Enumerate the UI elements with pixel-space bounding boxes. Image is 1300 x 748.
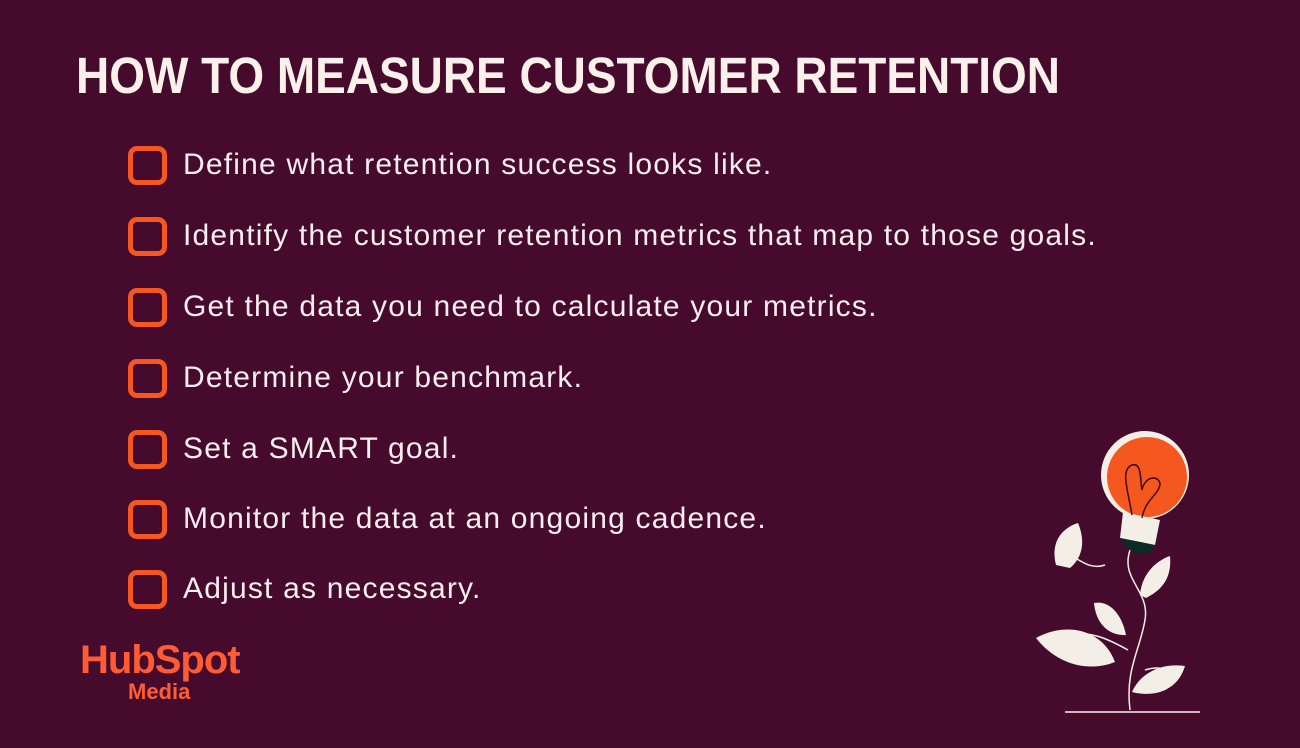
icon: lightbulb plant	[1036, 431, 1200, 713]
title: HOW TO MEASURE CUSTOMER RETENTION	[76, 47, 1060, 104]
logo: HubSpot Media: Media	[128, 679, 190, 704]
item 1: Define what retention success looks like.	[183, 148, 772, 181]
item 4: Determine your benchmark.	[183, 361, 583, 394]
logo: HubSpot Media: HubSpot	[80, 638, 240, 682]
item 7: Adjust as necessary.	[183, 572, 482, 605]
item 5: Set a SMART goal.	[183, 432, 459, 465]
logo: HubSpot Media	[80, 638, 240, 704]
bulb	[1101, 431, 1189, 519]
checklist	[128, 146, 1097, 609]
item 3: Get the data you need to calculate your metrics.	[183, 290, 878, 323]
item 6: Monitor the data at an ongoing cadence.	[183, 502, 767, 535]
item 2: Identify the customer retention metrics that map to those goals.	[183, 219, 1097, 252]
